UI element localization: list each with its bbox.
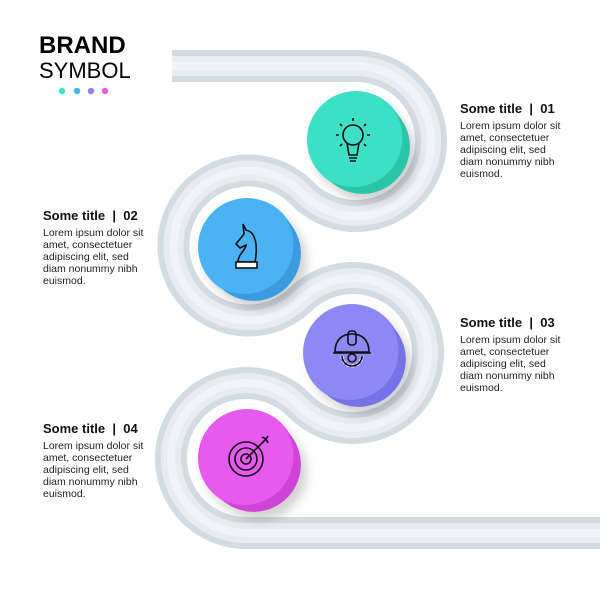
text block 04: Some title | 04 [43,421,138,436]
text block 04: adipiscing elit, sed [43,464,129,476]
text block 02: Lorem ipsum dolor sit [43,227,143,239]
icon: lightbulb [336,118,370,161]
text block 03 [460,315,560,394]
text block 02: Some title | 02 [43,208,138,223]
text block 02: euismod. [43,275,86,287]
text block 01: Some title | 01 [460,101,555,116]
text block 03: euismod. [460,382,503,394]
brand logo [39,32,131,94]
text block 03: Some title | 03 [460,315,555,330]
text block 03: adipiscing elit, sed [460,358,546,370]
text block 04: amet, consectetuer [43,452,132,464]
text block 02 [43,208,144,287]
text block 02: amet, consectetuer [43,239,132,251]
text block 01: diam nonummy nibh [460,156,555,168]
circle 4: magenta target [198,409,301,512]
circle 3: purple helmet [303,304,406,407]
text block 01: Lorem ipsum dolor sit [460,120,560,132]
circle 2: blue knight [198,198,301,301]
text block 02: adipiscing elit, sed [43,251,129,263]
text block 01: adipiscing elit, sed [460,144,546,156]
text block 04: Lorem ipsum dolor sit [43,440,143,452]
brand logo: BRAND [39,32,126,59]
brand logo: SYMBOL [39,58,131,83]
circle 1: teal lightbulb [307,91,410,194]
text block 04: diam nonummy nibh [43,476,138,488]
text block 03: Lorem ipsum dolor sit [460,334,560,346]
text block 01: amet, consectetuer [460,132,549,144]
text block 03: diam nonummy nibh [460,370,555,382]
text block 04: euismod. [43,488,86,500]
text block 02: diam nonummy nibh [43,263,138,275]
text block 01 [460,101,560,180]
text block 03: amet, consectetuer [460,346,549,358]
icon: chess knight [236,224,257,268]
text block 01: euismod. [460,168,503,180]
text block 04 [43,421,144,500]
icon: target [229,436,268,476]
icon: helmet gear [333,331,371,366]
